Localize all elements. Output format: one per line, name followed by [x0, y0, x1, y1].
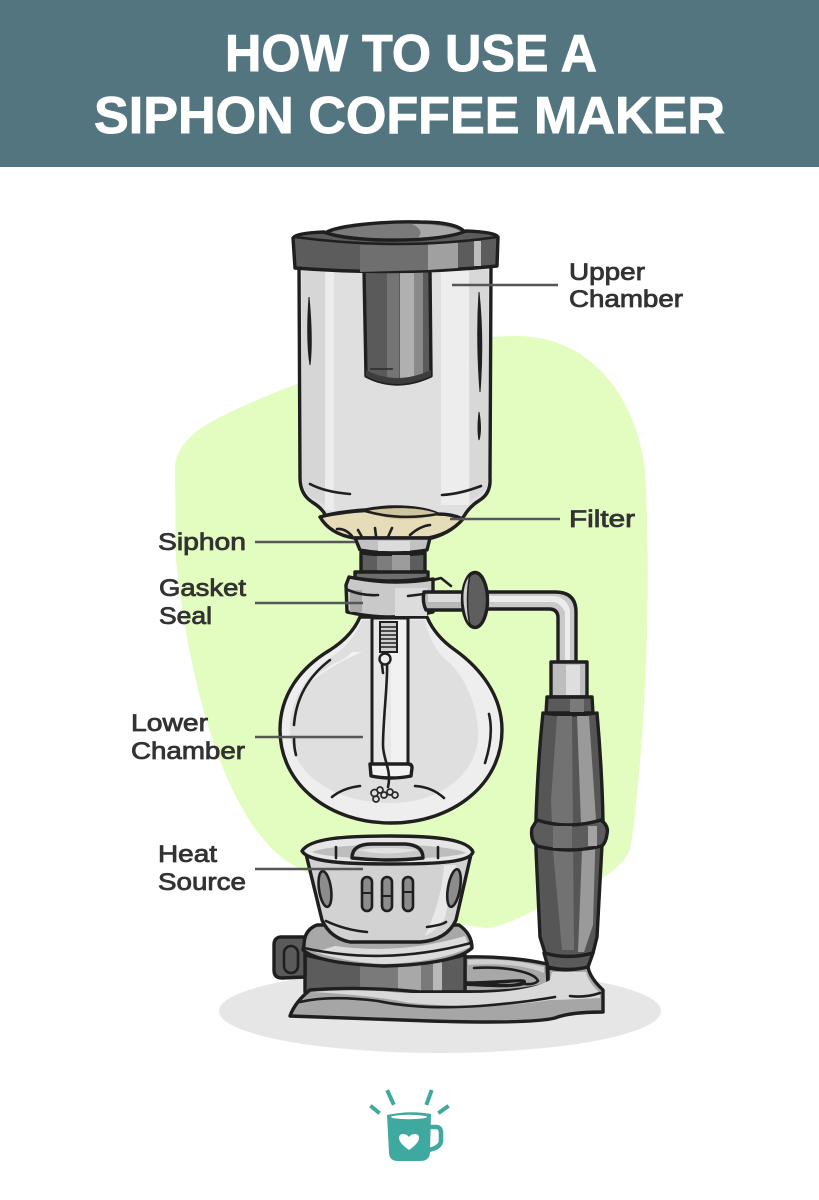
label: heat source — [158, 841, 363, 896]
label: heat source: Heat — [158, 841, 217, 868]
heart — [399, 1134, 419, 1150]
title — [94, 25, 725, 145]
burner base — [274, 925, 472, 993]
label: siphon: Siphon — [158, 529, 246, 556]
arm pipe and disc — [423, 572, 576, 662]
siphon collar — [355, 538, 430, 581]
logo: mug with heart — [372, 1092, 447, 1161]
label: upper chamber: Chamber — [569, 286, 683, 313]
label: gasket seal — [159, 575, 363, 630]
vent holes — [317, 868, 463, 911]
glass tube — [372, 618, 408, 768]
burner handle — [532, 662, 607, 970]
mug body — [387, 1112, 431, 1161]
label: lower chamber — [131, 710, 363, 765]
labels — [131, 259, 683, 896]
lower chamber — [280, 617, 502, 823]
header banner — [0, 0, 819, 167]
label: filter: Filter — [569, 506, 635, 533]
label: upper chamber — [452, 259, 683, 313]
label: gasket seal: Gasket — [159, 575, 246, 602]
siphon coffee maker illustration — [274, 222, 607, 1022]
label: heat source: Source — [158, 869, 246, 896]
label: lower chamber: Lower — [131, 710, 208, 737]
foot — [290, 967, 603, 1022]
label: gasket seal: Seal — [159, 603, 212, 630]
heat source bowl — [302, 836, 473, 942]
title: SIPHON COFFEE MAKER — [94, 87, 725, 145]
ground shadow — [219, 969, 661, 1053]
gasket seal — [346, 577, 451, 617]
inner tube — [364, 270, 431, 384]
plate — [303, 925, 472, 966]
filter — [320, 507, 463, 538]
background green blob — [175, 336, 648, 928]
label: upper chamber: Upper — [569, 259, 645, 286]
spring and chain — [371, 622, 398, 802]
side tab — [274, 937, 305, 978]
label: lower chamber: Chamber — [131, 738, 245, 765]
base ring — [465, 957, 548, 992]
lid — [293, 222, 498, 272]
mug handle — [428, 1127, 441, 1150]
rays — [372, 1092, 447, 1112]
title: HOW TO USE A — [225, 25, 597, 83]
burner cap — [352, 844, 423, 860]
upper chamber — [299, 266, 491, 538]
tube collar — [370, 764, 412, 778]
